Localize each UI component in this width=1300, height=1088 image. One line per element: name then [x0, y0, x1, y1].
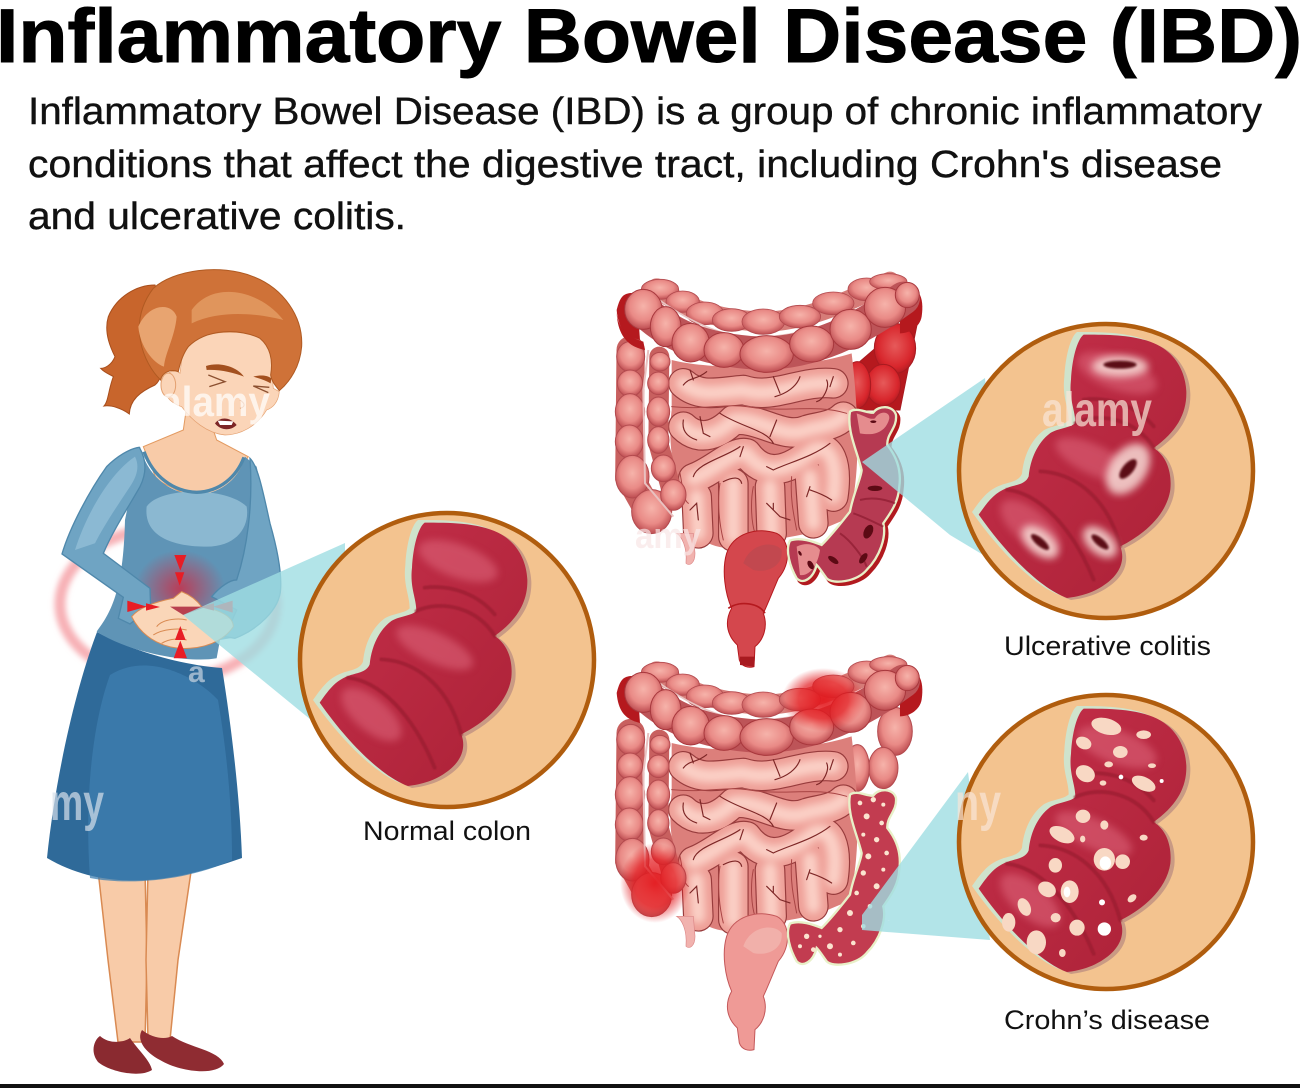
intro text: conditions that affect the digestive tract, including Crohn's disease	[28, 144, 1222, 186]
inflamed rectum	[724, 531, 788, 667]
right sleeve	[212, 458, 281, 638]
mouth	[215, 419, 237, 429]
watermark: alamy	[1042, 384, 1152, 437]
callout beam: ulcerative colitis	[862, 378, 1000, 565]
ear	[161, 373, 176, 397]
nose	[240, 400, 244, 408]
pain glow ring	[60, 528, 276, 680]
skirt	[47, 632, 242, 881]
inflamed descending colon	[844, 310, 920, 410]
watermark	[50, 378, 1152, 832]
torso	[97, 447, 280, 660]
label: Crohn's disease: Crohn’s disease	[1004, 1005, 1210, 1035]
face	[162, 332, 279, 435]
watermark: amy	[635, 515, 701, 556]
hair	[139, 270, 302, 391]
eyebrows	[206, 364, 271, 383]
belly pain glow	[135, 550, 225, 627]
circle: ulcerative colitis	[959, 324, 1253, 618]
inflamed spots	[782, 668, 865, 731]
shoes	[94, 1030, 224, 1074]
watermark: ny	[955, 774, 1001, 832]
callout beam: normal colon	[183, 543, 345, 724]
callout beam: Crohn's disease	[862, 772, 990, 940]
circle: normal colon	[300, 513, 594, 807]
red pain arrows	[127, 555, 233, 658]
label: ulcerative colitis: Ulcerative colitis	[1004, 631, 1211, 661]
watermark: alamy	[160, 378, 271, 425]
highlighted spotted section	[788, 790, 900, 965]
woman figure	[47, 270, 302, 1074]
intestine: Crohn's disease	[615, 657, 922, 1050]
colon segment with ulcers	[972, 332, 1190, 600]
highlighted ulcerated section	[788, 407, 903, 584]
descending colon	[845, 707, 912, 791]
left sleeve	[62, 447, 151, 624]
neck and chest	[143, 407, 248, 497]
rectum	[724, 914, 788, 1050]
legs	[98, 865, 192, 1042]
upper body in zoom coordinates	[62, 270, 302, 660]
circle: Crohn's disease	[959, 695, 1253, 989]
colon segment with spots	[972, 706, 1190, 974]
ponytail	[101, 285, 165, 414]
eyes closed	[208, 375, 269, 393]
colon segment	[313, 520, 531, 788]
watermark: my	[50, 774, 104, 832]
intro text	[28, 91, 1262, 238]
intro text: Inflammatory Bowel Disease (IBD) is a group of chronic inflammatory	[28, 91, 1262, 133]
intro text: and ulcerative colitis.	[28, 196, 406, 238]
intestine: ulcerative colitis	[615, 274, 922, 667]
hands	[132, 592, 233, 648]
label: normal colon: Normal colon	[363, 816, 531, 846]
watermark: a	[188, 656, 205, 689]
bottom edge bar	[0, 1084, 1300, 1088]
